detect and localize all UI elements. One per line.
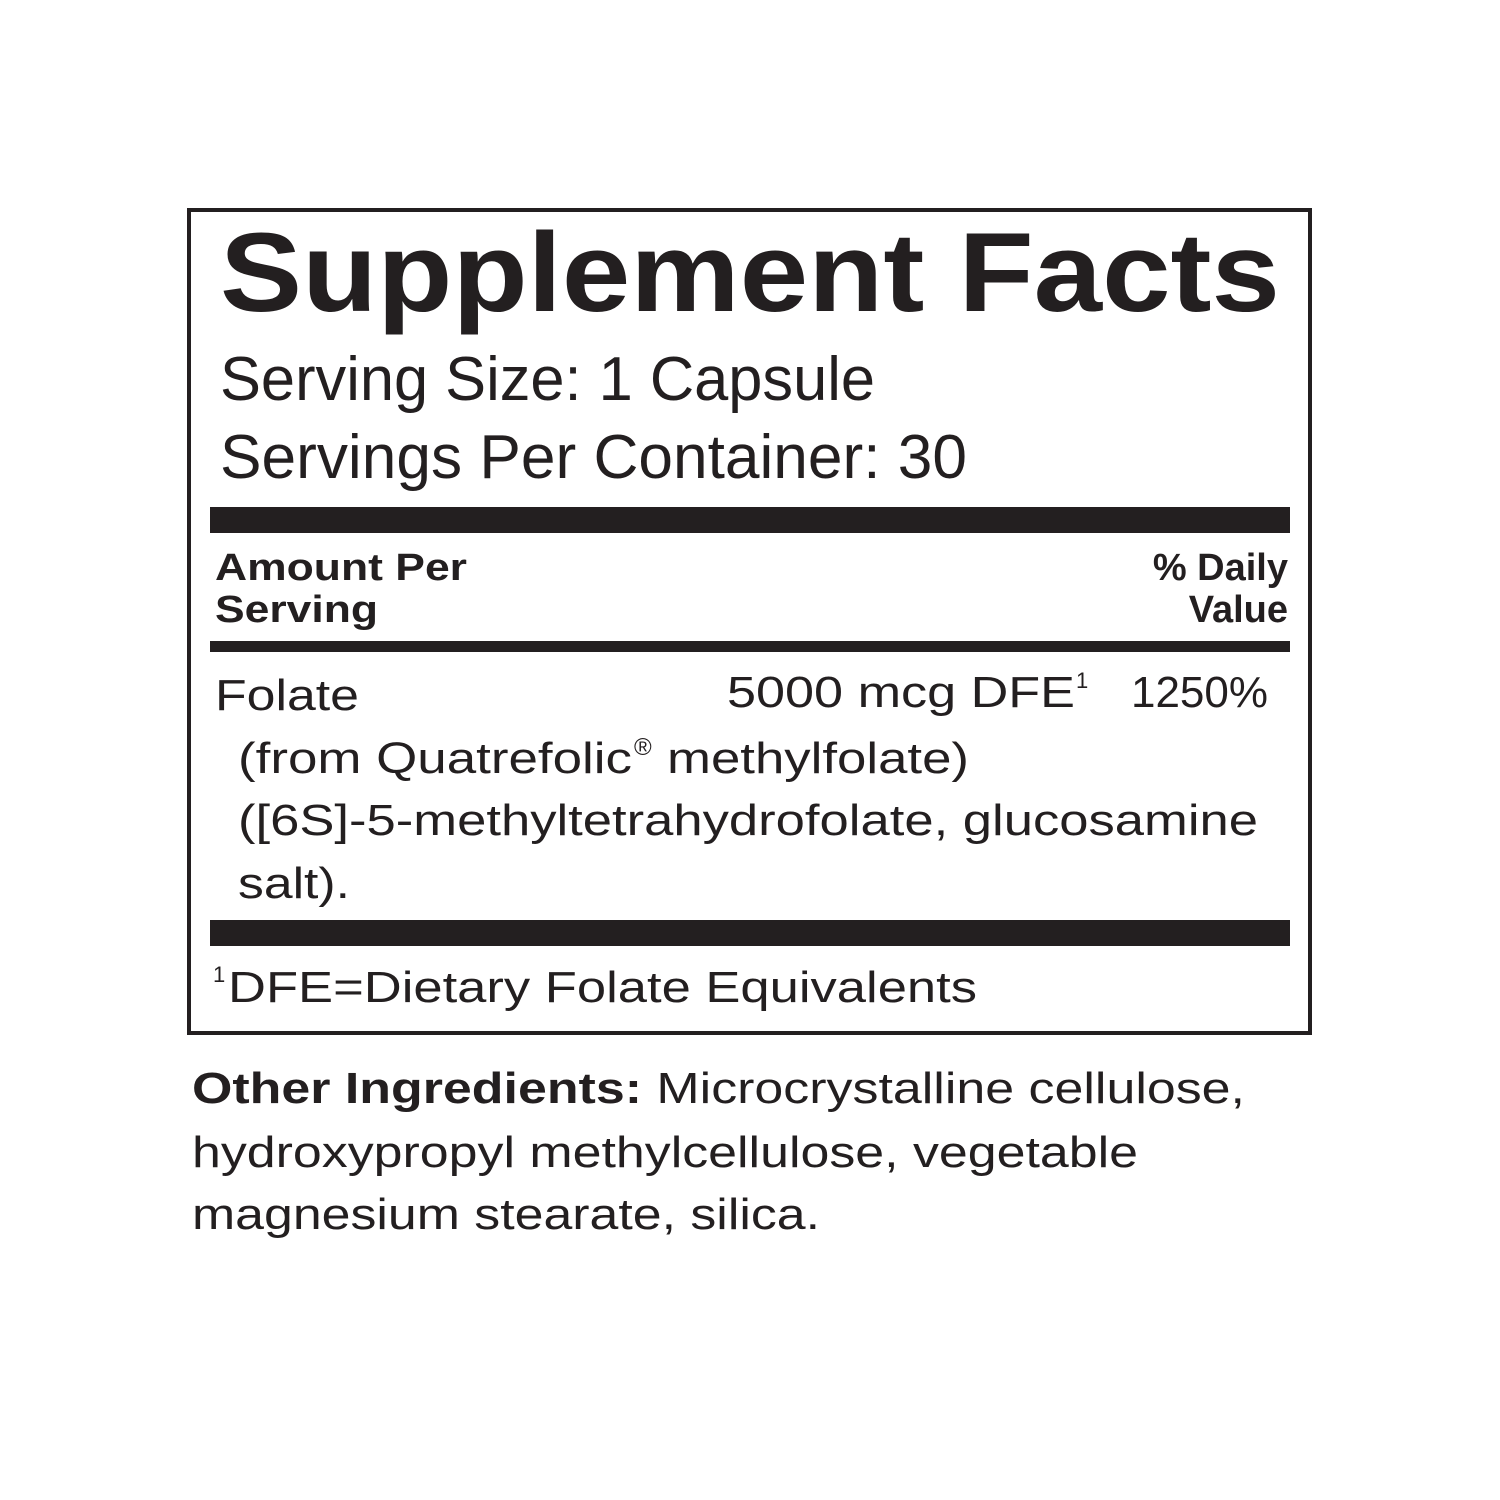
- bar 2: [210, 641, 1290, 652]
- nutrient row: folate: salt).: [238, 859, 350, 908]
- nutrient row: folate: ([6S]-5-methyltetrahydrofolate, glucosamine: [238, 796, 1258, 845]
- thick bar 1: [210, 507, 1290, 533]
- footnote: DFE=Dietary Folate Equivalents: [228, 963, 977, 1012]
- title: Supplement Facts: [220, 210, 1280, 335]
- other ingredients text: magnesium stearate, silica.: [192, 1190, 820, 1239]
- header: daily value: [1153, 547, 1288, 631]
- nutrient row: folate: methylfolate): [667, 734, 969, 783]
- other ingredients text: [192, 1064, 1245, 1239]
- nutrient row: folate: Folate: [215, 671, 359, 720]
- other ingredients text: hydroxypropyl methylcellulose, vegetable: [192, 1128, 1138, 1177]
- nutrient row: folate: ®: [634, 734, 652, 761]
- thick bar 3: [210, 920, 1290, 946]
- header: daily value: Value: [1189, 589, 1288, 631]
- header: amount per serving: Serving: [215, 589, 378, 631]
- panel: supplement facts box: [189, 210, 1310, 1033]
- footnote: 1: [213, 962, 225, 987]
- nutrient row: folate: (from Quatrefolic: [238, 734, 632, 783]
- nutrient row: folate: 1: [1076, 668, 1088, 693]
- nutrient row: folate: 1250%: [1131, 668, 1268, 717]
- header: amount per serving: [215, 547, 467, 631]
- header: amount per serving: Amount Per: [215, 547, 467, 589]
- nutrient row: folate: 5000 mcg DFE: [727, 668, 1075, 717]
- serving size: Serving Size: 1 Capsule: [220, 345, 875, 414]
- servings per container: Servings Per Container: 30: [220, 423, 967, 492]
- nutrient row: folate: [215, 668, 1268, 908]
- header: daily value: % Daily: [1153, 547, 1288, 589]
- other ingredients text: Other Ingredients: Microcrystalline cellulose,: [192, 1064, 1245, 1113]
